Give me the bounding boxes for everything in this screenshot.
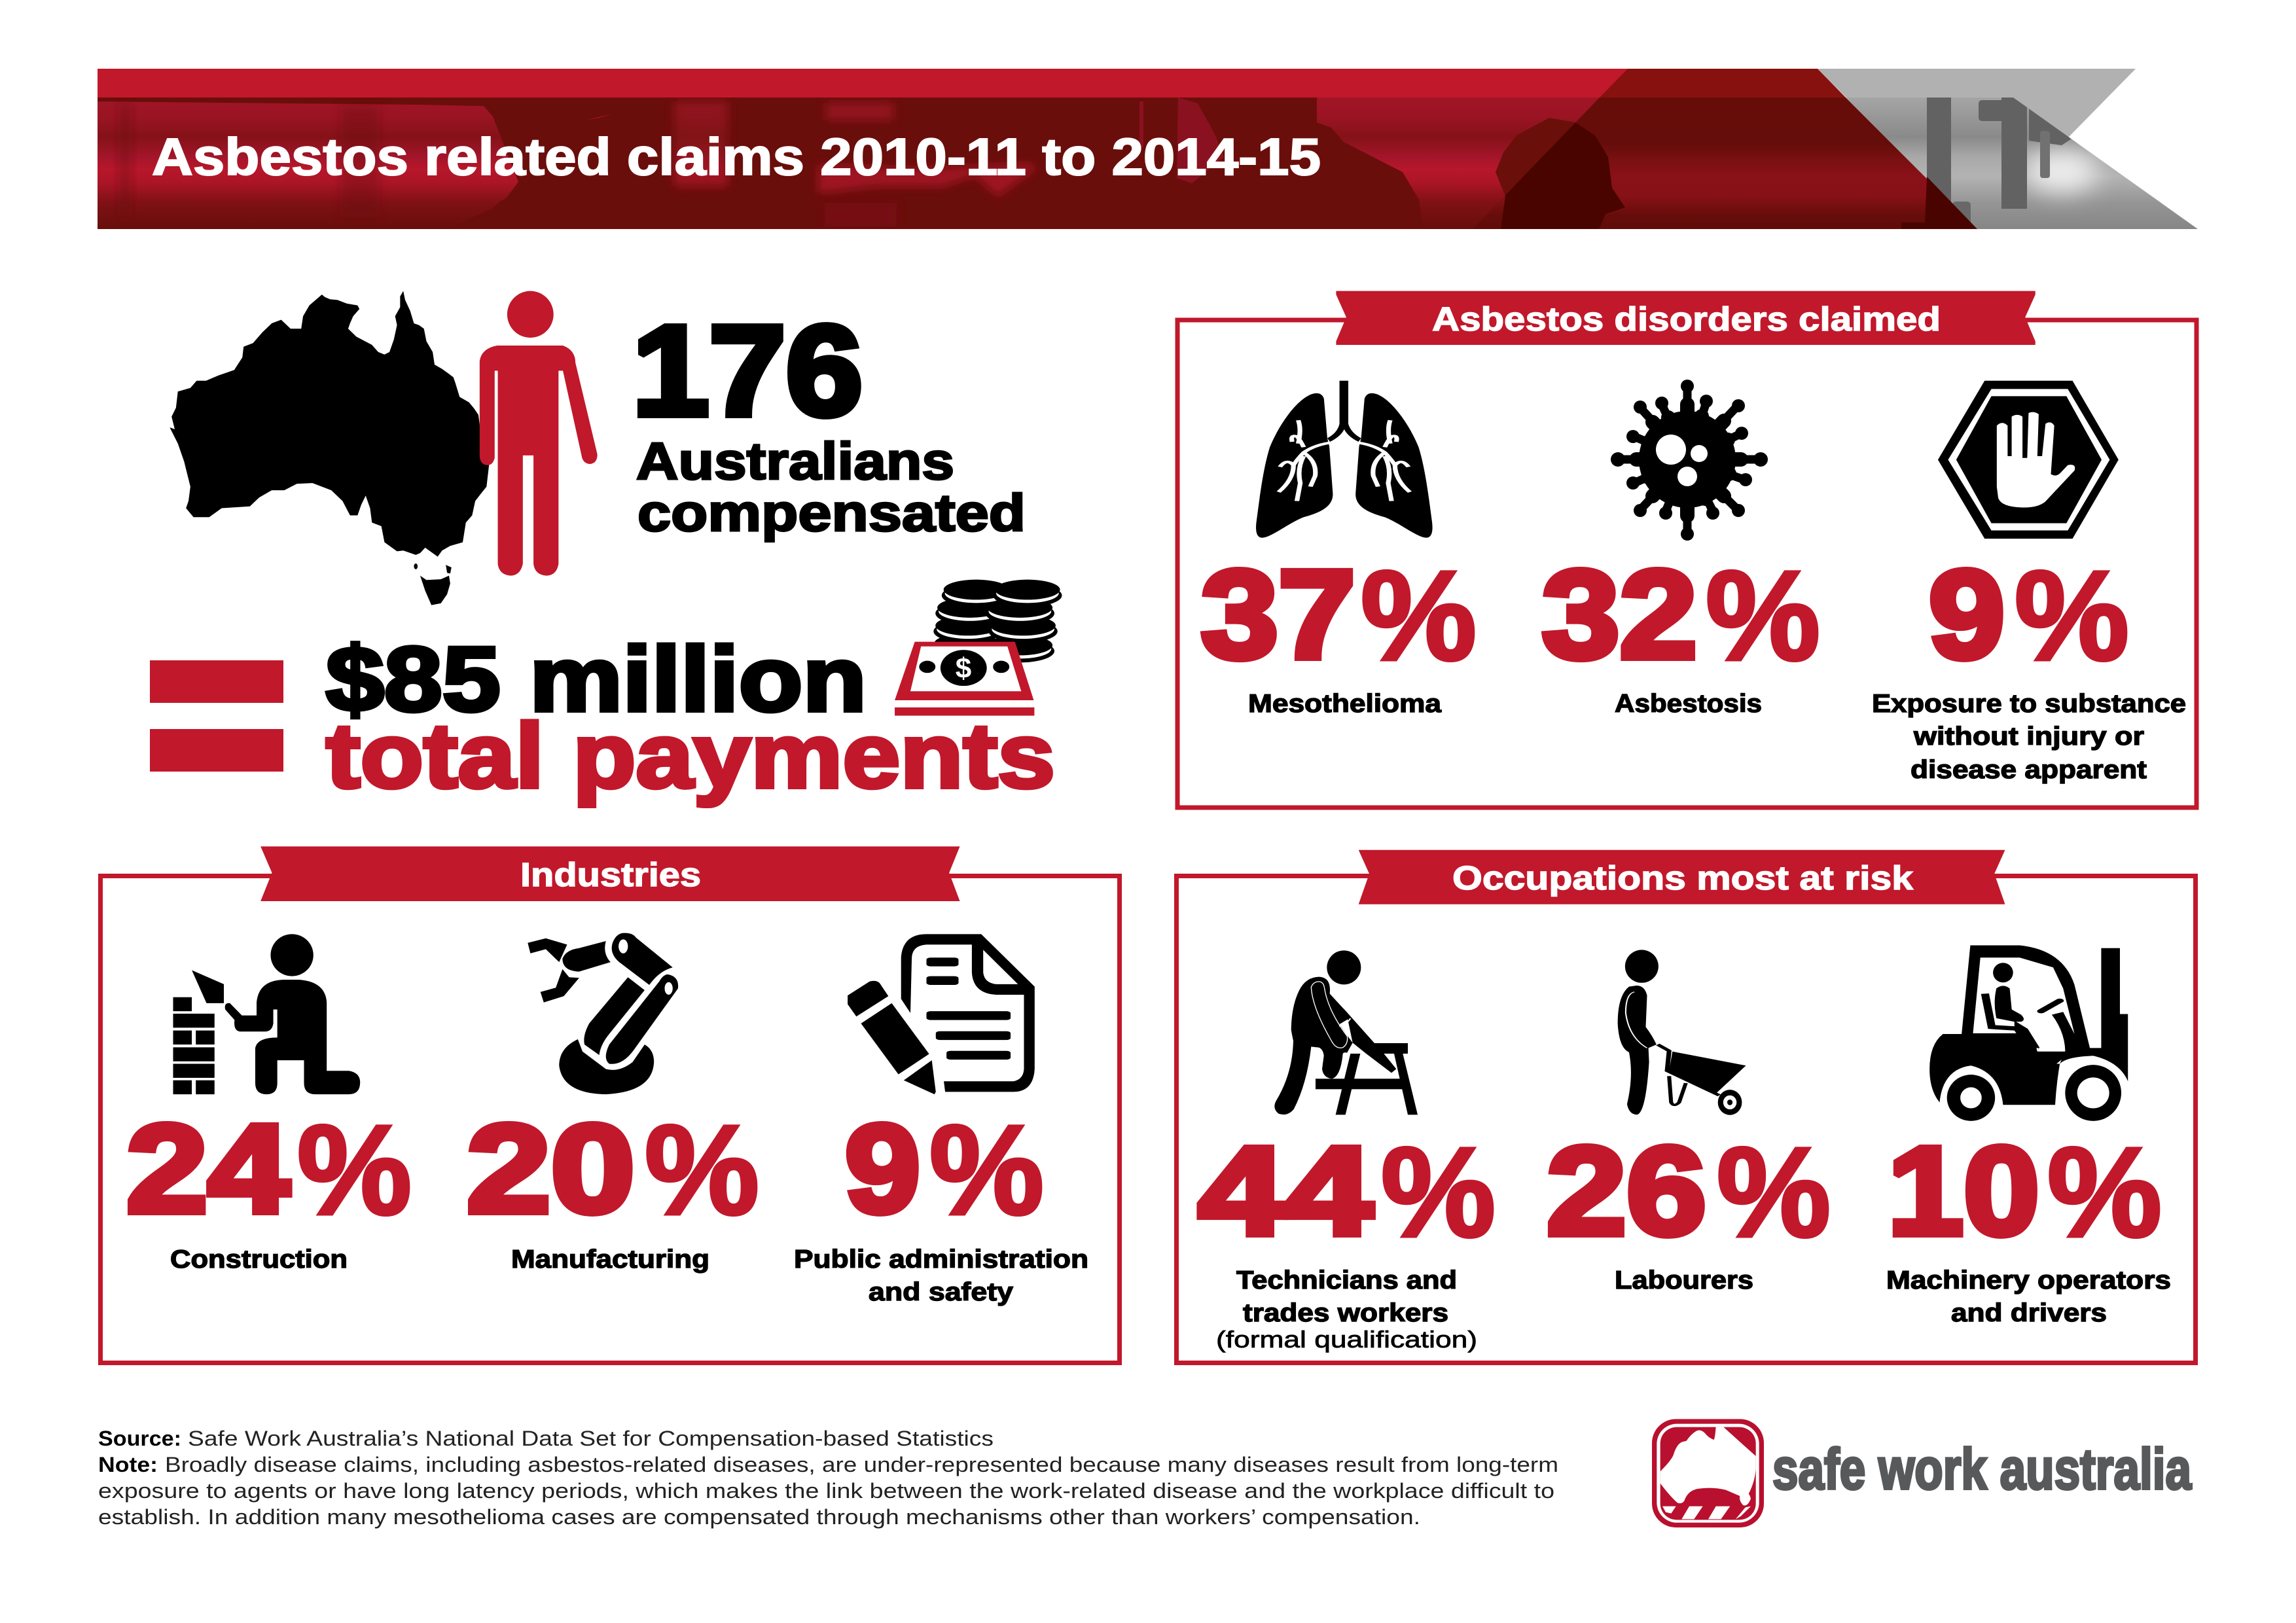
panel: industries xyxy=(101,846,1119,1363)
stat: 176 Australians compensated: Australians xyxy=(636,432,954,490)
stat: 10% machinery operators: Machinery operators xyxy=(1886,1266,2171,1294)
stat: 176 Australians compensated xyxy=(632,299,1026,542)
icon: carpenter sawing xyxy=(1274,950,1418,1115)
stat: 37% mesothelioma: Mesothelioma xyxy=(1248,690,1441,718)
icon: money and coins: $ xyxy=(956,652,971,685)
map of Australia xyxy=(170,291,489,605)
stat: 10% machinery operators xyxy=(1886,1120,2171,1327)
panel banner: occupations: Occupations most at risk xyxy=(1452,859,1914,897)
stat: 26% labourers: Labourers xyxy=(1615,1266,1753,1294)
source and note text: Note: xyxy=(98,1453,158,1476)
stat: 9% public administration: 9 xyxy=(845,1098,920,1239)
stat: $85 million total payments: $85 million xyxy=(326,628,867,730)
stat: 10% machinery operators: % xyxy=(2047,1121,2162,1264)
stat: $85 million total payments: total payments xyxy=(326,704,1055,807)
icon: forklift xyxy=(1929,945,2128,1121)
stat: 20% manufacturing xyxy=(467,1098,759,1274)
stat: 176 Australians compensated: 176 xyxy=(632,299,863,442)
stat: 9% exposure: disease apparent xyxy=(1910,756,2147,784)
logo: safe work australia: safe work australia xyxy=(1772,1436,2192,1501)
panel banner: industries: Industries xyxy=(520,856,701,893)
source and note text: Broadly disease claims, including asbestos-related diseases, are under-represented because many diseases result from long-term xyxy=(165,1453,1558,1476)
source and note text: exposure to agents or have long latency periods, which makes the link between the work-related disease and the workplace difficult to xyxy=(98,1479,1554,1503)
stat: 26% labourers: 26 xyxy=(1547,1120,1706,1261)
stat: 10% machinery operators: and drivers xyxy=(1951,1299,2107,1327)
stat: 9% public administration: Public administration xyxy=(794,1245,1088,1274)
stat: 37% mesothelioma: % xyxy=(1361,544,1477,687)
stat: 9% exposure: % xyxy=(2015,544,2129,687)
stat: 32% asbestosis: 32 xyxy=(1542,544,1697,685)
icon: money and coins xyxy=(895,580,1062,716)
stat: 176 Australians compensated: compensated xyxy=(637,484,1026,542)
stat: 32% asbestosis: % xyxy=(1706,544,1820,687)
stat: 24% construction: 24 xyxy=(126,1098,289,1239)
logo emblem xyxy=(1652,1419,1764,1527)
stat: 9% exposure xyxy=(1872,544,2186,784)
source and note text: Source: xyxy=(98,1427,181,1450)
grey photo corner xyxy=(1846,69,2198,229)
stat: 24% construction: % xyxy=(297,1099,412,1241)
stat: 20% manufacturing: % xyxy=(645,1099,759,1241)
header banner xyxy=(98,69,2198,229)
stat: 20% manufacturing: 20 xyxy=(467,1098,635,1239)
stat: 44% technicians and trades workers: trades workers xyxy=(1243,1299,1448,1327)
icon: bricklayer xyxy=(173,934,360,1094)
stat: 37% mesothelioma: 37 xyxy=(1201,544,1355,685)
person icon xyxy=(480,291,598,576)
panel: asbestos disorders claimed xyxy=(1177,291,2197,808)
icon: document and pencil xyxy=(848,934,1035,1094)
icon: stop hand hexagon xyxy=(1938,381,2119,539)
stat: 10% machinery operators: 10 xyxy=(1888,1120,2039,1261)
stat: 24% construction xyxy=(126,1098,412,1274)
source and note text: Safe Work Australia’s National Data Set for Compensation-based Statistics xyxy=(188,1427,994,1450)
equals sign xyxy=(150,660,283,772)
icon: robot arm xyxy=(528,933,678,1094)
stat: 44% technicians and trades workers: Technicians and xyxy=(1236,1266,1457,1294)
logo: safe work australia xyxy=(1652,1419,2192,1527)
stat: 26% labourers: % xyxy=(1717,1121,1831,1264)
stat: 9% exposure: 9 xyxy=(1929,544,2005,685)
source and note text: establish. In addition many mesothelioma cases are compensated through mechanisms other than workers’ compensation. xyxy=(98,1505,1420,1529)
stat: 9% public administration: % xyxy=(929,1099,1044,1241)
icon: labourer with wheelbarrow xyxy=(1618,950,1746,1115)
stat: $85 million total payments xyxy=(326,628,1055,807)
stat: 44% technicians and trades workers: (formal qualification) xyxy=(1216,1326,1477,1353)
hard hat silhouette xyxy=(1496,118,1575,195)
source and note text xyxy=(98,1427,1558,1529)
title: Asbestos related claims 2010-11 to 2014-15 xyxy=(152,128,1321,186)
panel banner: occupations xyxy=(1359,850,2005,904)
stat: 37% mesothelioma xyxy=(1201,544,1477,718)
panel banner: industries xyxy=(260,846,960,901)
stat: 9% exposure: without injury or xyxy=(1913,722,2144,751)
stat: 20% manufacturing: Manufacturing xyxy=(511,1245,709,1274)
panel: occupations most at risk xyxy=(1177,850,2195,1363)
panel banner: asbestos disorders: Asbestos disorders claimed xyxy=(1432,300,1941,338)
stat: 26% labourers xyxy=(1547,1120,1831,1294)
stat: 44% technicians and trades workers xyxy=(1198,1120,1496,1353)
stat: 9% public administration xyxy=(794,1098,1088,1306)
stat: 9% public administration: and safety xyxy=(869,1278,1013,1306)
stat: 32% asbestosis: Asbestosis xyxy=(1615,690,1762,718)
header photo background xyxy=(98,98,1977,229)
stat: 44% technicians and trades workers: 44 xyxy=(1198,1120,1372,1261)
icon: asbestos fibre cell xyxy=(1611,380,1768,541)
panel banner: asbestos disorders xyxy=(1336,291,2036,345)
stat: 9% exposure: Exposure to substance xyxy=(1872,690,2186,718)
icon: lungs xyxy=(1256,381,1433,538)
stat: 44% technicians and trades workers: % xyxy=(1381,1121,1496,1264)
stat: 24% construction: Construction xyxy=(170,1245,348,1274)
stat: 32% asbestosis xyxy=(1542,544,1820,718)
